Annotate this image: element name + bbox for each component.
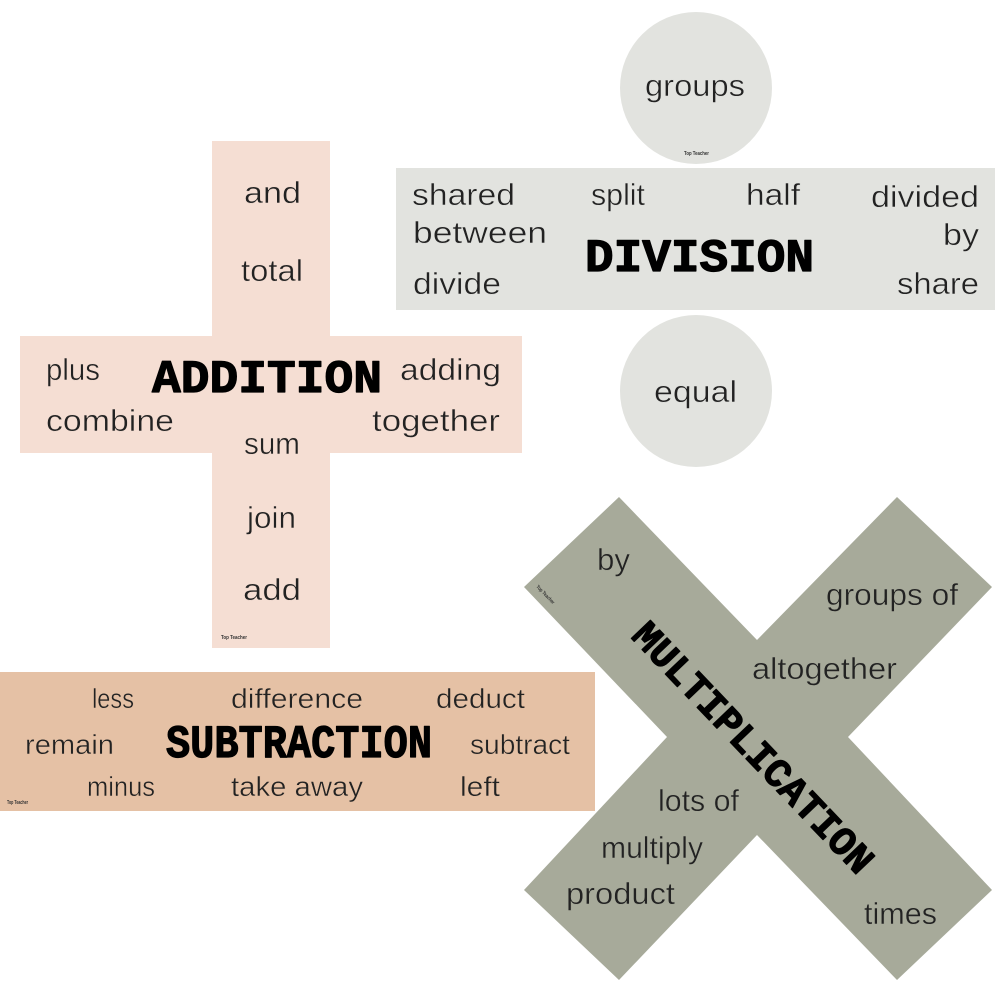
brand mark: Top Teacher — [221, 635, 247, 641]
brand mark: Top Teacher — [535, 584, 556, 606]
heading: multiplication: MULTIPLICATION — [621, 615, 881, 885]
circle: equal: equal — [654, 374, 737, 409]
addition words: sum — [244, 426, 300, 461]
addition words: total — [241, 253, 303, 288]
x shape — [524, 497, 992, 980]
division words: by — [943, 217, 980, 252]
circle: groups: Top Teacher — [684, 151, 709, 157]
subtraction bar — [0, 672, 595, 811]
addition words: and — [244, 175, 301, 210]
addition words: adding — [400, 352, 501, 387]
division words: divided — [871, 179, 979, 214]
division words: split — [591, 177, 645, 212]
multiplication words: altogether — [752, 651, 897, 686]
multiplication words — [566, 542, 958, 931]
addition words — [46, 175, 501, 607]
subtraction words: minus — [87, 771, 155, 802]
heading: subtraction: SUBTRACTION — [166, 719, 432, 771]
division words: share — [897, 266, 979, 301]
multiplication words: multiply — [601, 830, 703, 865]
circle: equal — [620, 315, 772, 467]
addition words: add — [243, 572, 301, 607]
multiplication words: lots of — [658, 783, 739, 818]
circle: groups: groups — [645, 68, 745, 103]
subtraction words: remain — [25, 729, 114, 760]
subtraction words: less — [92, 683, 134, 714]
panel: addition — [20, 141, 522, 648]
subtraction words: left — [460, 771, 500, 802]
heading: addition: ADDITION — [152, 354, 382, 406]
multiplication words: by — [597, 542, 630, 577]
division words: between — [413, 215, 547, 250]
heading: division: DIVISION — [585, 233, 814, 285]
panel: division — [396, 12, 995, 467]
subtraction words: take away — [231, 771, 363, 802]
subtraction words: subtract — [470, 729, 570, 760]
addition words: together — [372, 403, 500, 438]
brand mark: Top Teacher — [7, 800, 28, 806]
panel: multiplication — [524, 497, 992, 980]
division words — [412, 177, 980, 301]
addition words: plus — [46, 352, 100, 387]
multiplication words: groups of — [826, 577, 958, 612]
division words: half — [746, 177, 800, 212]
circle: groups — [620, 12, 772, 164]
addition words: combine — [46, 403, 174, 438]
division bar — [396, 168, 995, 310]
addition words: join — [246, 500, 296, 535]
plus shape — [20, 141, 522, 648]
subtraction words: deduct — [436, 683, 525, 714]
multiplication words: product — [566, 876, 675, 911]
subtraction words — [25, 683, 570, 802]
division words: divide — [413, 266, 501, 301]
division words: shared — [412, 177, 515, 212]
panel: subtraction — [0, 672, 595, 811]
multiplication words: times — [864, 896, 937, 931]
subtraction words: difference — [231, 683, 363, 714]
